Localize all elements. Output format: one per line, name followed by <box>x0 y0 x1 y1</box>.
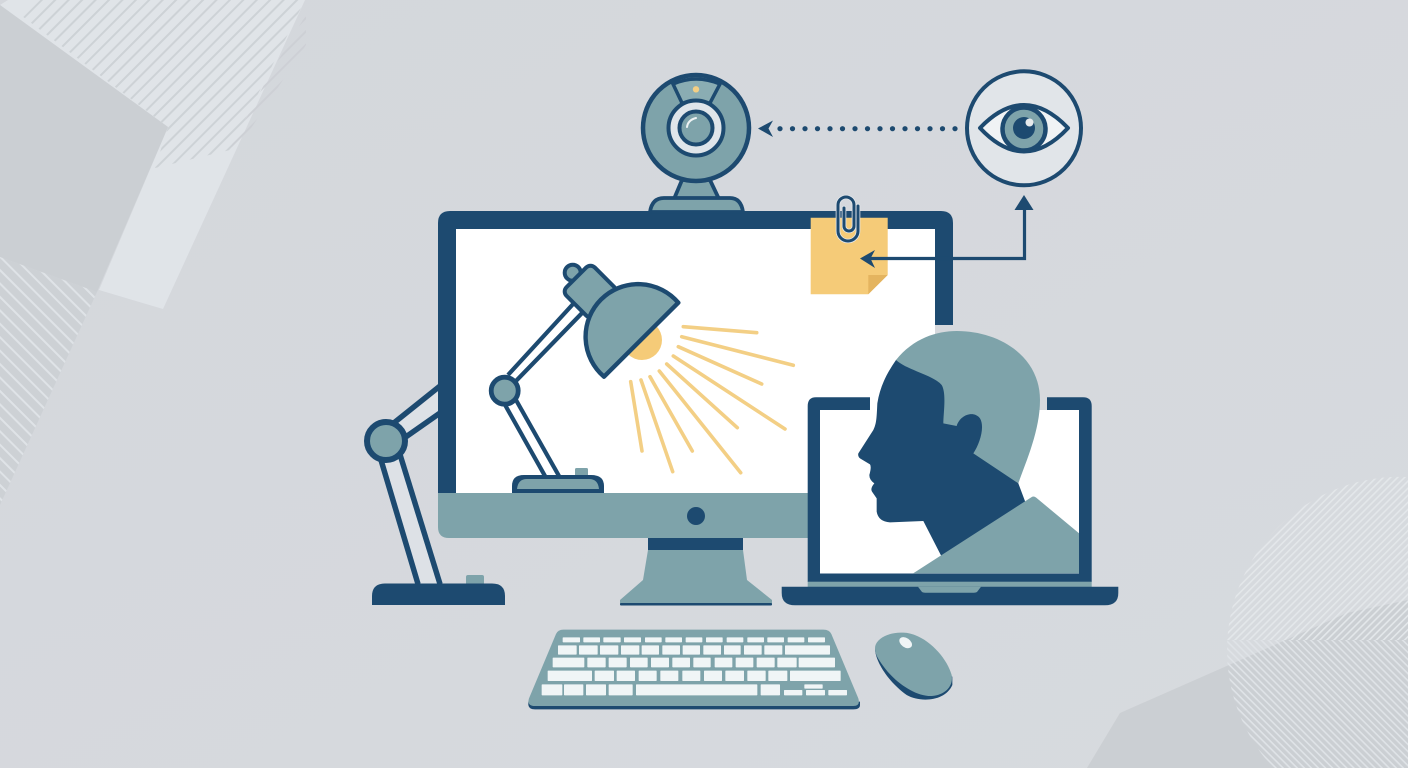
person silhouette <box>858 331 1040 560</box>
webcam stand <box>650 180 743 212</box>
monitor frame <box>438 211 953 500</box>
background: chevron hatched circle <box>1227 477 1408 768</box>
hair <box>896 331 1040 483</box>
mouse button <box>897 635 914 651</box>
webcam <box>643 75 749 212</box>
mouse body <box>875 633 952 696</box>
laptop <box>782 397 1118 605</box>
sticky note <box>811 218 888 294</box>
lamp knob <box>565 265 581 281</box>
paper clip <box>838 197 858 241</box>
laptop notch <box>918 587 981 593</box>
monitor <box>438 211 953 606</box>
mouse underside <box>875 649 952 700</box>
monitor chin <box>438 493 815 538</box>
lamp bulb <box>622 320 662 360</box>
laptop frame <box>808 397 1092 582</box>
laptop screen <box>820 410 1079 574</box>
webcam indicator <box>693 86 699 93</box>
background: stripes on band <box>22 0 305 168</box>
webcam lens ring <box>668 100 724 156</box>
lamp base button <box>466 575 484 585</box>
lamp joint <box>491 377 518 404</box>
on-screen desk lamp <box>491 263 793 493</box>
monitor power dot <box>687 507 705 525</box>
webcam lens <box>680 112 712 144</box>
lamp base <box>512 475 604 493</box>
connector arrows <box>860 195 1034 268</box>
lamp button <box>575 468 588 476</box>
eye icon <box>967 71 1081 185</box>
lamp arm upper <box>390 386 440 441</box>
background: dark polygon <box>0 5 168 292</box>
monitor screen <box>456 229 935 495</box>
background: lower right polygon <box>1087 600 1408 768</box>
background: faint stripes beyond band <box>230 15 306 148</box>
keyboard <box>528 630 860 709</box>
webcam body <box>643 75 749 181</box>
light rays <box>631 327 793 473</box>
keyboard keys <box>542 637 847 695</box>
lens highlight <box>687 118 696 127</box>
lamp upper arms <box>508 303 584 382</box>
desk lamp behind monitor <box>367 386 505 605</box>
lamp joint <box>367 422 405 460</box>
lamp base <box>372 584 505 605</box>
laptop base <box>782 587 1118 605</box>
webcam top segment <box>673 79 720 103</box>
person shoulder <box>913 496 1079 573</box>
keyboard body <box>528 630 859 706</box>
dotted arrow from eye to webcam <box>758 120 958 137</box>
lamp arm lower <box>378 448 440 584</box>
laptop hinge <box>808 582 1092 587</box>
keyboard edge <box>528 702 860 709</box>
background: lower left hatch <box>0 257 97 505</box>
lamp base inner <box>517 479 599 489</box>
lamp lower arms <box>504 400 559 476</box>
monitor stand <box>620 538 772 606</box>
mouse <box>875 633 952 700</box>
lamp shade <box>586 284 678 377</box>
lamp neck <box>562 263 619 320</box>
background: light diagonal band <box>0 0 305 309</box>
face <box>858 360 1028 560</box>
